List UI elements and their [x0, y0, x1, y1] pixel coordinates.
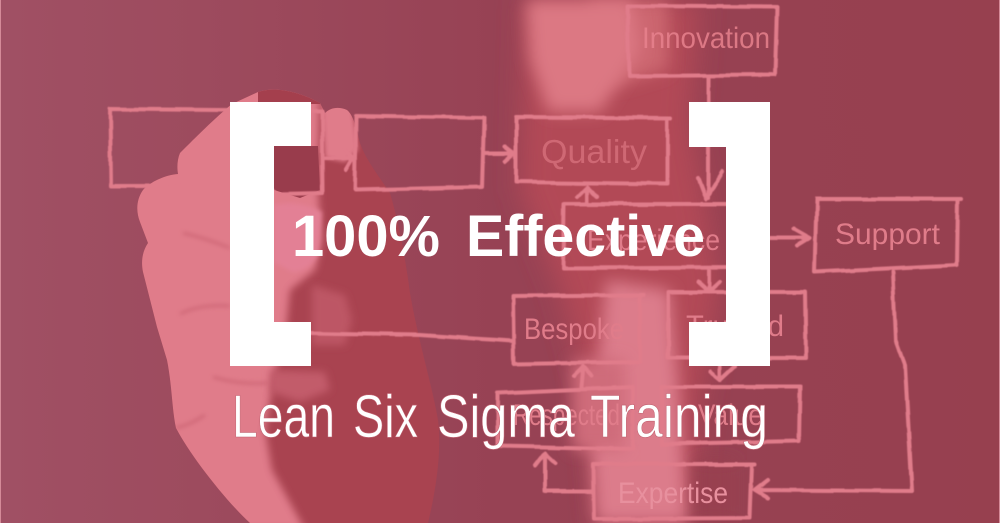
arrow: trusted to value: [710, 360, 735, 380]
heading: [292, 204, 705, 269]
box: expertise: [593, 464, 755, 519]
arrow: second box to quality: [484, 146, 514, 161]
label: trusted: Trusted: [686, 310, 784, 343]
lower fold tone: [270, 370, 330, 402]
subtitle word: Lean: Lean: [232, 383, 335, 450]
index fingernail: [274, 146, 320, 198]
box: experience: [563, 204, 740, 268]
heading word: Effective: Effective: [466, 204, 705, 269]
label: support: Support: [835, 218, 941, 251]
heading word: 100%: 100%: [292, 204, 440, 269]
arrow: experience to quality: [577, 187, 597, 203]
label: quality: Quality: [541, 133, 648, 170]
subtitle word: Training: Training: [590, 383, 768, 450]
left bracket: [230, 102, 311, 366]
arrow: first to second box: [323, 150, 353, 170]
label: experience: Experience: [587, 224, 720, 257]
label: bespoke: Bespoke: [524, 313, 624, 346]
box: innovation: [627, 6, 777, 76]
diagram labels: [513, 22, 941, 510]
subtitle word: Sigma: Sigma: [437, 383, 576, 450]
box: second empty: [355, 116, 484, 190]
subtitle: [232, 383, 768, 450]
finger creases: [176, 233, 268, 428]
blurred figure in background: [520, 0, 735, 523]
right bracket: [689, 102, 770, 366]
box: support: [815, 199, 961, 272]
subtitle word: Six: Six: [353, 383, 418, 450]
arrow: support to expertise: [755, 272, 912, 498]
box: bespoke: [513, 295, 644, 364]
box: first empty: [110, 109, 323, 194]
hand light side: [120, 80, 322, 523]
hand: [137, 90, 440, 523]
arrow: experience to trusted: [698, 270, 720, 292]
label: expertise: Expertise: [618, 477, 728, 510]
label: value: Value: [698, 399, 763, 432]
hand shadow side: [266, 124, 440, 523]
arrow: expertise to respected: [535, 453, 592, 491]
arrow: experience to support: [770, 229, 810, 246]
line: bespoke to hand: [311, 333, 513, 341]
arrow: respected to bespoke: [574, 367, 591, 387]
label: innovation: Innovation: [642, 22, 770, 55]
box: trusted: [668, 292, 806, 358]
finger tip: [274, 204, 322, 272]
arrow: innovation to experience: [698, 76, 722, 199]
knuckle: [312, 285, 352, 345]
box: value: [662, 387, 800, 444]
box: respected: [498, 387, 633, 449]
label: respected: Respected: [513, 399, 620, 432]
thumb: [322, 104, 358, 162]
nail tip: [258, 88, 320, 104]
box: quality: [516, 117, 671, 184]
